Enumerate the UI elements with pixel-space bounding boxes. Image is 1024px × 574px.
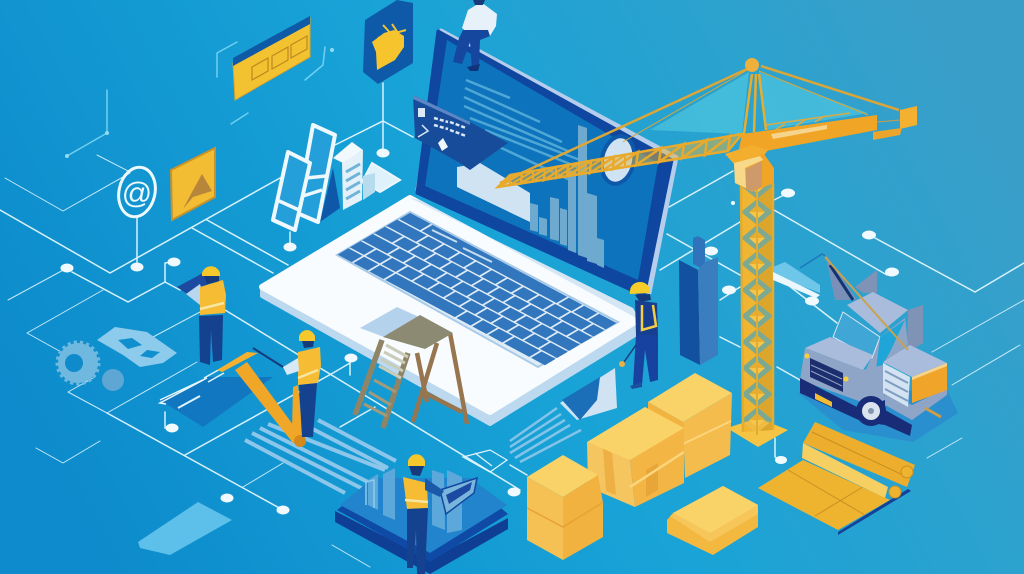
truck boom cable <box>825 257 908 350</box>
truck cargo box <box>883 345 947 436</box>
construction plates behind truck <box>773 254 826 298</box>
cardboard box: center <box>587 407 684 507</box>
truck bumper <box>800 378 885 425</box>
screen light panel <box>457 163 530 222</box>
crane <box>498 58 917 447</box>
cardboard box: back right <box>648 373 732 478</box>
crane mast <box>744 74 766 134</box>
crane counter jib <box>739 106 917 151</box>
truck grille <box>804 354 848 392</box>
worker by laptop hinge <box>619 282 658 389</box>
screen circle gauge <box>595 131 641 189</box>
cardboard box stack: front <box>527 455 603 560</box>
blueprint plate <box>160 368 273 427</box>
icon: white ladders and shelf <box>273 125 400 230</box>
tablet on platform <box>440 478 477 514</box>
screen text lines <box>464 80 585 180</box>
icon: yellow square with arrow <box>171 148 215 220</box>
small floor grid <box>463 450 507 472</box>
worker on platform <box>403 454 444 574</box>
icon: blue hexagon with house <box>363 0 413 84</box>
blueprint stripes <box>245 420 396 493</box>
crane guy cables and glass <box>500 66 899 183</box>
hand truck tool <box>217 348 306 447</box>
crane tower <box>741 183 773 435</box>
wooden step ladder <box>355 315 467 428</box>
icon: yellow browser card <box>233 16 310 100</box>
icon: at-sign pin <box>114 164 160 220</box>
platform with city model <box>335 468 508 574</box>
icon: faded gear and roof <box>58 327 177 391</box>
crane cab <box>725 145 774 192</box>
screen bar chart <box>530 125 604 268</box>
truck door <box>907 305 923 353</box>
blue tower <box>679 236 718 365</box>
helmet <box>202 266 220 276</box>
floating dark card <box>413 95 508 170</box>
truck cab <box>800 292 908 405</box>
laptop base <box>262 198 640 424</box>
trackpad <box>360 307 430 340</box>
laptop <box>262 30 677 424</box>
crane jib lattice <box>498 134 742 187</box>
worker with tool <box>283 330 321 437</box>
crane base <box>727 418 788 447</box>
truck shadow <box>798 390 958 442</box>
light blue floor tile <box>138 502 232 555</box>
worker with tablet <box>177 266 226 365</box>
vest <box>200 280 226 315</box>
rolled yellow material <box>758 422 915 535</box>
icon: at-sign pin: @ <box>122 177 152 210</box>
trousers <box>199 315 223 365</box>
laptop screen <box>413 30 677 296</box>
paper with chart under laptop <box>510 368 617 462</box>
tablet <box>177 273 212 296</box>
keyboard <box>337 212 618 367</box>
truck <box>798 253 958 442</box>
person sitting on laptop <box>453 0 497 71</box>
flat cardboard package <box>667 486 758 555</box>
truck wheel <box>856 396 886 426</box>
node dots <box>60 48 899 514</box>
truck boom fin <box>825 253 877 300</box>
